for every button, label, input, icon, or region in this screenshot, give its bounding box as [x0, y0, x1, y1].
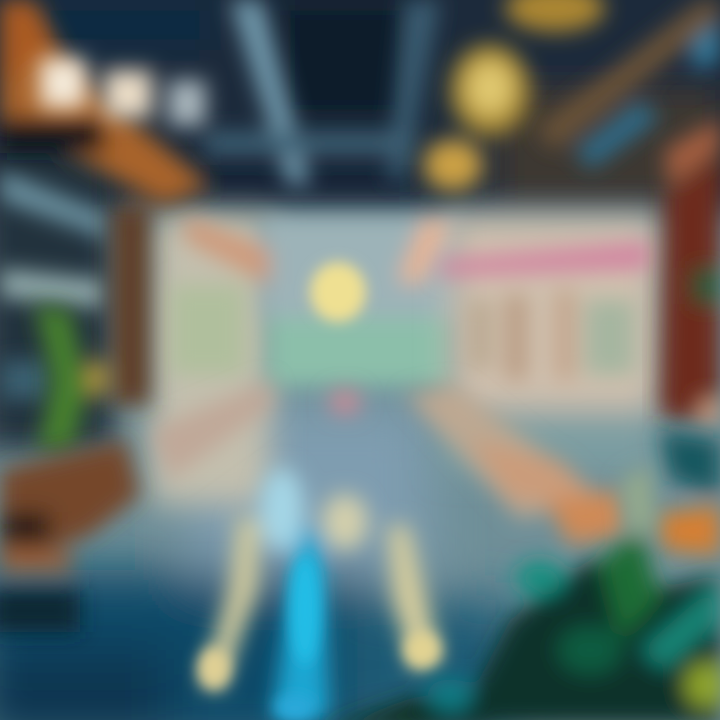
floor highlights	[198, 555, 440, 720]
left table	[0, 440, 140, 632]
left shelf stripes	[0, 170, 110, 400]
teal bench right	[655, 430, 720, 555]
back wall	[170, 215, 462, 386]
right wall panels	[440, 242, 650, 380]
foreground plants	[320, 465, 720, 720]
central yellow light	[310, 262, 366, 322]
ceiling lights white	[40, 58, 206, 126]
red door right	[660, 118, 720, 425]
left wall and shelves	[0, 120, 270, 505]
wood beam top left	[0, 0, 210, 405]
left plant	[35, 305, 109, 450]
floor light reflections	[200, 390, 442, 720]
ceiling beams	[205, 0, 720, 185]
benches on the right	[150, 380, 625, 545]
right wall	[440, 215, 660, 470]
hanging lamps	[423, 0, 605, 191]
ceiling	[0, 0, 720, 210]
floor	[0, 405, 520, 720]
